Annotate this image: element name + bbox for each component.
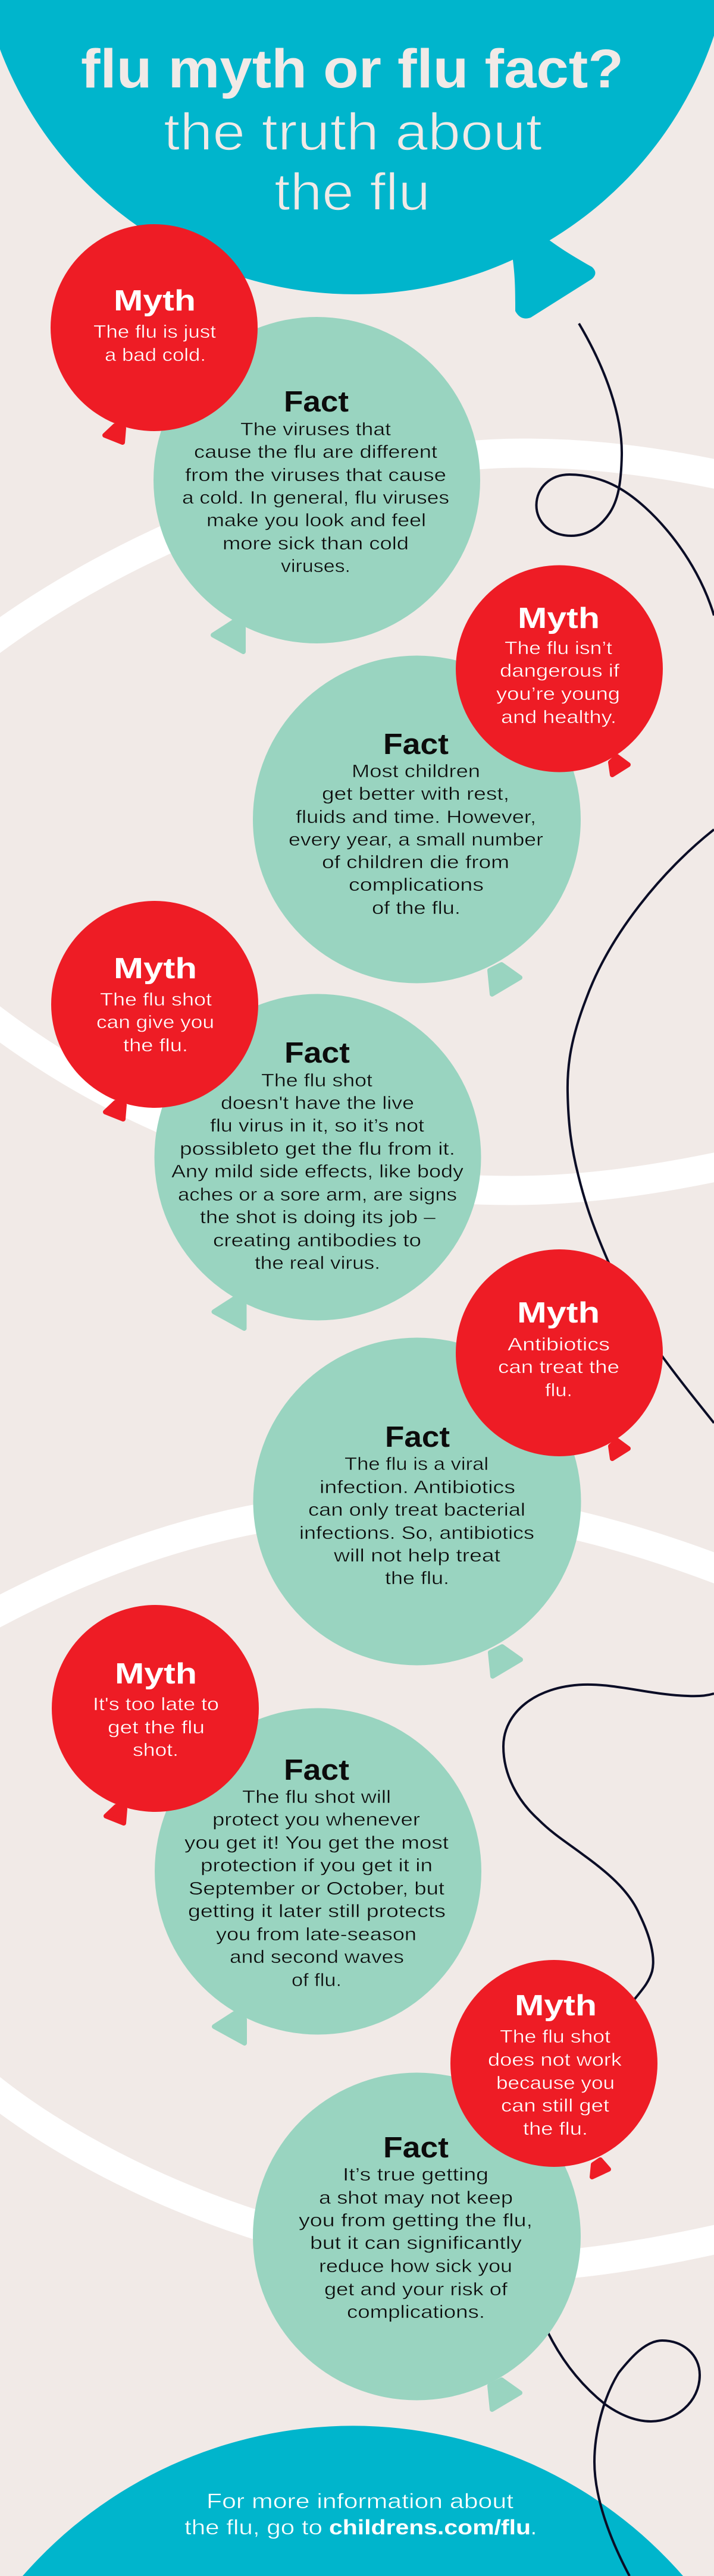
panel: fact 6: Fact xyxy=(383,2132,449,2164)
fact 6 text: It’s true getting xyxy=(343,2164,488,2185)
panel: fact 3: Fact xyxy=(284,1037,350,1069)
panel: fact 6 xyxy=(253,2073,581,2409)
balloon string 1 xyxy=(536,323,714,615)
panel: myth 2: Myth xyxy=(518,602,600,634)
panel: myth 2 xyxy=(456,565,663,775)
fact 6 text: a shot may not keep xyxy=(319,2187,513,2208)
footer text: the flu, go to xyxy=(184,2516,322,2539)
fact 4 text: can only treat bacterial xyxy=(308,1499,525,1520)
fact 4 text: will not help treat xyxy=(333,1545,500,1566)
panel: myth 5 xyxy=(52,1605,259,1823)
fact 6 text: reduce how sick you xyxy=(319,2255,512,2276)
fact 4 text: the flu. xyxy=(385,1567,449,1588)
fact 3 text: aches or a sore arm, are signs xyxy=(178,1184,457,1205)
panel: myth 4 xyxy=(456,1249,663,1459)
myth 3 text: The flu shot xyxy=(100,989,212,1010)
myth 5 text xyxy=(93,1694,219,1760)
panel: fact 5: Fact xyxy=(284,1754,349,1786)
panel: fact 4 xyxy=(253,1338,581,1676)
panel: fact 2: Fact xyxy=(383,728,449,761)
myth 3 text xyxy=(96,989,214,1055)
fact 1 text: cause the flu are different xyxy=(194,441,437,462)
fact 3 text: The flu shot xyxy=(261,1070,372,1091)
fact 5 text: of flu. xyxy=(292,1969,342,1990)
fact 3 text: flu virus in it, so it’s not xyxy=(210,1115,424,1136)
myth 5 text: It's too late to xyxy=(93,1694,219,1714)
panel: fact 2 xyxy=(253,655,581,994)
fact 5 text: protection if you get it in xyxy=(201,1855,433,1876)
fact 2 text: Most children xyxy=(352,761,480,781)
fact 5 text: getting it later still protects xyxy=(188,1900,446,1921)
myth 6 text: The flu shot xyxy=(500,2026,610,2047)
footer text: childrens.com/flu xyxy=(329,2516,531,2539)
fact 2 text xyxy=(289,761,543,918)
panel: myth 4: Myth xyxy=(517,1297,600,1329)
footer balloon xyxy=(23,2426,683,2576)
myth 4 text: Antibiotics xyxy=(508,1334,610,1355)
myth 2 text: and healthy. xyxy=(501,706,616,727)
panel: myth 3: Myth xyxy=(114,953,197,985)
fact 6 text: get and your risk of xyxy=(324,2279,508,2299)
myth 4 text: can treat the xyxy=(498,1356,619,1377)
title: the flu xyxy=(274,162,430,221)
myth 1 text xyxy=(93,321,216,365)
fact 5 text: protect you whenever xyxy=(212,1809,420,1830)
fact 6 text xyxy=(299,2164,533,2322)
fact 5 text: The flu shot will xyxy=(242,1786,391,1807)
fact 5 text: September or October, but xyxy=(189,1878,444,1899)
myth 3 text: can give you xyxy=(96,1011,214,1032)
fact 3 text xyxy=(171,1070,464,1273)
panel: fact 5 xyxy=(155,1708,481,2043)
myth 2 text xyxy=(496,637,620,727)
fact 6 text: but it can significantly xyxy=(310,2232,522,2253)
fact 3 text: the real virus. xyxy=(255,1252,380,1273)
fact 4 text: infections. So, antibiotics xyxy=(299,1522,534,1543)
balloon string 3 xyxy=(503,1685,714,2004)
myth 4 text: flu. xyxy=(545,1380,572,1400)
panel: myth 5: Myth xyxy=(115,1658,197,1690)
fact 3 text: possibleto get the flu from it. xyxy=(180,1138,455,1159)
panel: fact 3 xyxy=(155,994,481,1328)
panel: myth 1 xyxy=(51,224,258,442)
myth 2 text: The flu isn’t xyxy=(505,637,612,658)
fact 3 text: Any mild side effects, like body xyxy=(171,1161,464,1182)
footer text: . xyxy=(531,2516,537,2539)
fact 2 text: of the flu. xyxy=(372,897,461,918)
panel: fact 1: Fact xyxy=(284,386,349,418)
balloon string 4 xyxy=(544,2325,700,2576)
title: flu myth or flu fact? xyxy=(81,39,624,99)
fact 1 text xyxy=(182,419,449,576)
myth 6 text: because you xyxy=(496,2072,615,2093)
fact 5 text xyxy=(184,1786,449,1990)
myth 1 text: The flu is just xyxy=(93,321,216,342)
myth 5 text: shot. xyxy=(133,1739,178,1760)
fact 4 text xyxy=(299,1453,534,1588)
fact 3 text: the shot is doing its job – xyxy=(200,1207,436,1227)
myth 6 text: does not work xyxy=(488,2049,622,2070)
fact 5 text: and second waves xyxy=(230,1946,404,1967)
panel: fact 4: Fact xyxy=(385,1421,450,1453)
fact 2 text: complications xyxy=(349,874,484,895)
fact 4 text: The flu is a viral xyxy=(345,1453,488,1474)
myth 1 text: a bad cold. xyxy=(105,344,206,365)
myth 2 text: dangerous if xyxy=(500,660,619,681)
fact 2 text: get better with rest, xyxy=(322,783,509,804)
title xyxy=(81,39,624,221)
header balloon xyxy=(0,0,714,319)
myth 6 text: can still get xyxy=(501,2095,609,2116)
panel: myth 6: Myth xyxy=(515,1990,597,2022)
fact 2 text: fluids and time. However, xyxy=(296,806,536,827)
panel: myth 3 xyxy=(51,901,258,1119)
fact 3 text: creating antibodies to xyxy=(213,1230,421,1251)
fact 1 text: a cold. In general, flu viruses xyxy=(182,487,449,508)
fact 1 text: more sick than cold xyxy=(223,533,409,554)
myth 6 text xyxy=(488,2026,622,2139)
fact 2 text: of children die from xyxy=(322,852,509,872)
fact 3 text: doesn't have the live xyxy=(221,1092,414,1113)
fact 1 text: make you look and feel xyxy=(206,510,426,530)
balloon string 2 xyxy=(568,830,714,1423)
fact 1 text: viruses. xyxy=(281,555,350,576)
fact 6 text: you from getting the flu, xyxy=(299,2210,533,2231)
myth 5 text: get the flu xyxy=(108,1717,205,1738)
fact 4 text: infection. Antibiotics xyxy=(320,1477,515,1497)
footer text xyxy=(184,2490,537,2539)
title: the truth about xyxy=(164,102,542,161)
panel: myth 1: Myth xyxy=(114,285,196,317)
fact 5 text: you get it! You get the most xyxy=(184,1832,449,1853)
panel: fact 1 xyxy=(154,317,480,652)
panel: myth 6 xyxy=(450,1960,657,2177)
footer text: For more information about xyxy=(206,2490,513,2513)
fact 1 text: The viruses that xyxy=(240,419,391,439)
myth 4 text xyxy=(498,1334,619,1400)
myth 3 text: the flu. xyxy=(123,1035,188,1055)
myth 6 text: the flu. xyxy=(523,2118,588,2139)
fact 1 text: from the viruses that cause xyxy=(185,464,446,485)
myth 2 text: you’re young xyxy=(496,683,620,704)
fact 5 text: you from late-season xyxy=(216,1924,416,1944)
fact 2 text: every year, a small number xyxy=(289,829,543,850)
fact 6 text: complications. xyxy=(347,2301,485,2322)
